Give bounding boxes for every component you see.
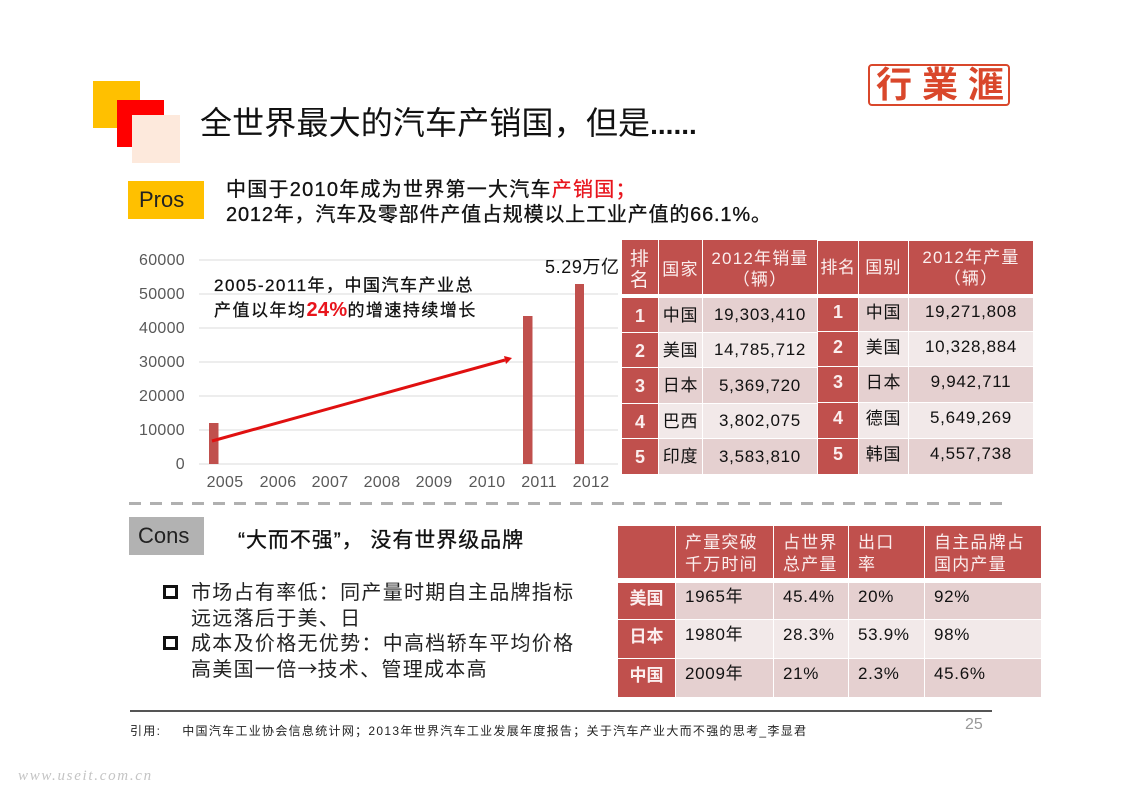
table: 2012 production ranking: 韩国 — [866, 445, 901, 464]
table: 2012 production ranking: 排名 — [820, 258, 856, 277]
y axis labels: 60000 — [139, 252, 185, 269]
table: 2012 production ranking: 日本 — [866, 373, 901, 392]
table: country comparison: 占世界 — [783, 532, 838, 552]
pros text: 2012年，汽车及零部件产值占规模以上工业产值的66.1%。 — [226, 204, 772, 226]
table: 2012 sales ranking: 3,583,810 — [719, 446, 801, 466]
table: 2012 sales ranking: 4 — [635, 412, 645, 432]
table: 2012 sales ranking: 2012年销量 — [711, 248, 809, 268]
table: 2012 sales ranking: 中国 — [663, 306, 698, 324]
bullet text: market share: 市场占有率低：同产量时期自主品牌指标 — [191, 582, 574, 604]
x axis labels: 2005 — [207, 474, 243, 491]
table: 2012 sales ranking: 2 — [635, 340, 645, 360]
table: 2012 sales ranking: 1 — [635, 306, 645, 326]
y axis labels: 30000 — [139, 354, 185, 371]
decorative title squares — [93, 81, 180, 163]
table: country comparison: 21% — [783, 664, 819, 683]
table: 2012 production ranking: 3 — [833, 372, 843, 392]
table: country comparison: 产量突破 — [685, 532, 758, 552]
table: country comparison: 2009年 — [685, 664, 743, 682]
table: 2012 sales ranking: 巴西 — [663, 412, 698, 430]
x axis labels: 2009 — [416, 474, 452, 491]
bullet icon — [163, 585, 178, 599]
cons heading: “大而不强”， 没有世界级品牌 — [238, 529, 524, 552]
watermark: www.useit.com.cn — [18, 768, 153, 784]
table: country comparison: 1965年 — [685, 586, 743, 606]
x axis labels: 2006 — [260, 474, 296, 491]
table: 2012 sales ranking: 14,785,712 — [714, 340, 806, 359]
table: country comparison: 自主品牌占 — [934, 532, 1025, 552]
table: 2012 sales ranking: 国家 — [662, 260, 699, 278]
table: country comparison: 率 — [858, 554, 876, 574]
y axis labels: 10000 — [139, 422, 185, 439]
table: country comparison: 45.6% — [934, 664, 986, 683]
table: 2012 sales ranking: 3,802,075 — [719, 411, 801, 430]
table: country comparison: 92% — [934, 587, 970, 606]
table: country comparison: 千万时间 — [685, 554, 758, 574]
bullet text: cost and price — [191, 633, 574, 682]
table: country comparison: 日本 — [630, 626, 664, 646]
bullet icon — [163, 636, 178, 650]
table: 2012 sales ranking: 5,369,720 — [719, 376, 801, 394]
table: 2012 production ranking: 中国 — [866, 303, 901, 322]
cons badge: Cons — [138, 523, 189, 548]
table: country comparison: 美国 — [630, 588, 664, 608]
table: 2012 production ranking: 4,557,738 — [930, 444, 1012, 463]
table: 2012 production ranking: 4 — [833, 408, 843, 428]
table: 2012 production ranking: 19,271,808 — [925, 302, 1017, 321]
table: 2012 production ranking: 5 — [833, 444, 843, 464]
pros badge: Pros — [139, 187, 184, 212]
logo stamp: 行業滙 — [876, 64, 1010, 105]
table: 2012 production ranking — [818, 241, 1033, 474]
table: 2012 production ranking: 10,328,884 — [925, 336, 1017, 356]
table: country comparison: 28.3% — [783, 625, 835, 644]
x axis labels: 2007 — [312, 474, 348, 491]
table: 2012 production ranking: 国别 — [865, 258, 902, 277]
bullet text: cost and price: 高美国一倍→技术、管理成本高 — [191, 653, 488, 682]
table: 2012 production ranking: 1 — [833, 302, 843, 322]
growth arrow — [212, 356, 512, 441]
y axis labels: 50000 — [139, 286, 185, 303]
table: 2012 sales ranking: 日本 — [663, 376, 698, 395]
table: country comparison: 20% — [858, 587, 894, 606]
y axis labels — [139, 252, 185, 473]
table: country comparison: 出口 — [858, 532, 894, 552]
cons bullet list — [163, 582, 574, 682]
table: country comparison: 98% — [934, 625, 970, 644]
table: 2012 production ranking: 5,649,269 — [930, 408, 1012, 427]
cons badge — [129, 517, 204, 555]
table: 2012 production ranking: 德国 — [866, 409, 901, 428]
bullet text: market share: 远远落后于美、日 — [191, 608, 361, 630]
table: 2012 sales ranking — [622, 240, 817, 474]
table: country comparison: 国内产量 — [934, 554, 1007, 574]
table: 2012 sales ranking: 名 — [630, 270, 650, 291]
chart annotation: 2005-2011年，中国汽车产业总 — [214, 276, 474, 295]
x axis labels: 2010 — [469, 474, 505, 491]
bar chart: industry output 2005-2012 — [139, 252, 618, 491]
y axis labels: 40000 — [139, 320, 185, 337]
table: 2012 sales ranking: 印度 — [663, 447, 698, 466]
bullet text: cost and price: 成本及价格无优势：中高档轿车平均价格 — [191, 633, 574, 655]
x axis labels: 2012 — [573, 474, 609, 491]
table: 2012 sales ranking: 19,303,410 — [714, 305, 806, 324]
table: 2012 production ranking: 美国 — [866, 338, 901, 356]
title: 全世界最大的汽车产销国，但是...... — [200, 98, 697, 144]
bullet text: market share — [191, 582, 574, 630]
pros text — [226, 178, 772, 226]
table: country comparison: 53.9% — [858, 625, 910, 644]
chart annotation: 产值以年均24%的增速持续增长 — [214, 299, 477, 321]
bars — [209, 284, 584, 464]
page number: 25 — [965, 716, 983, 733]
table: 2012 production ranking: （辆） — [944, 268, 998, 288]
2012 value label: 5.29万亿 — [545, 257, 620, 277]
table: 2012 production ranking: 2012年产量 — [922, 248, 1020, 266]
table: 2012 sales ranking: 3 — [635, 376, 645, 396]
citation: 引用: 中国汽车工业协会信息统计网；2013年世界汽车工业发展年度报告；关于汽车产业大而不强的思考_李显君 — [130, 724, 807, 738]
x axis labels — [207, 474, 609, 491]
table: country comparison: 总产量 — [783, 554, 838, 574]
table: country comparison: 中国 — [630, 666, 664, 684]
table: country comparison: 45.4% — [783, 587, 835, 606]
chart annotation — [214, 276, 477, 321]
table: 2012 production ranking: 9,942,711 — [931, 372, 1011, 391]
table: 2012 sales ranking: 5 — [635, 447, 645, 467]
x axis labels: 2008 — [364, 474, 400, 491]
y axis labels: 20000 — [139, 388, 185, 405]
table: 2012 sales ranking: 美国 — [663, 340, 698, 360]
table: 2012 sales ranking: （辆） — [733, 270, 787, 288]
table: country comparison: 1980年 — [685, 624, 743, 644]
table: country comparison: 2.3% — [858, 664, 900, 683]
pros badge — [128, 181, 204, 219]
table: country comparison — [618, 526, 1041, 697]
x axis labels: 2011 — [521, 474, 557, 491]
table: 2012 production ranking: 2 — [833, 336, 843, 356]
pros text: 中国于2010年成为世界第一大汽车产销国； — [226, 179, 637, 201]
table: 2012 sales ranking: 排 — [630, 249, 650, 270]
y axis labels: 0 — [176, 456, 185, 473]
